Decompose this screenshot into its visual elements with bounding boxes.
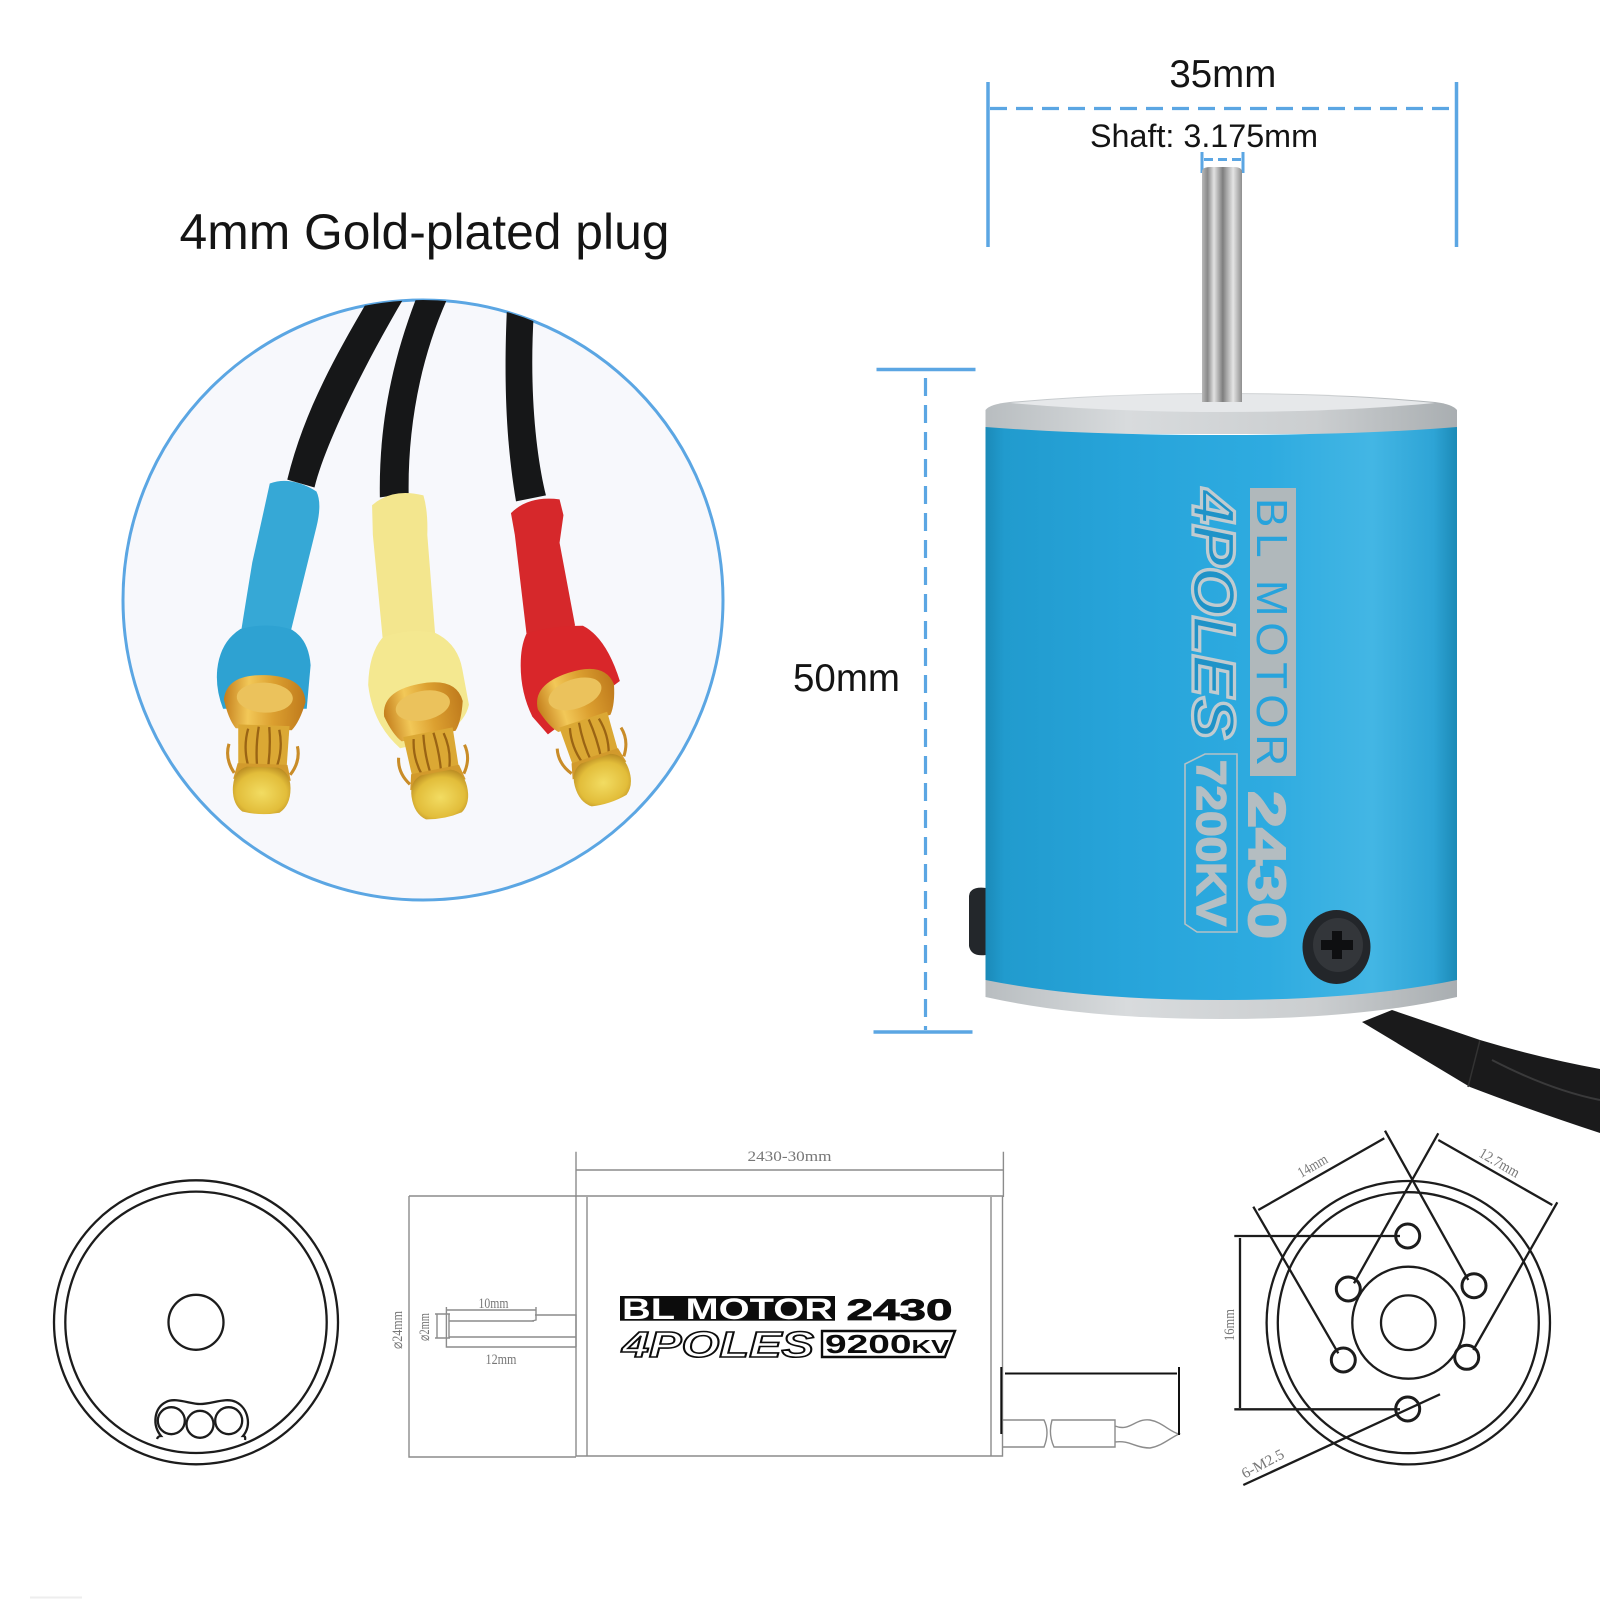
label: 50mm height: 50mm	[793, 657, 900, 700]
motor body outline	[576, 1152, 1003, 1456]
motor screw	[1302, 910, 1370, 984]
text: 14mm: 14mm	[1295, 1151, 1331, 1181]
motor label: 4POLES: 4POLES	[1180, 488, 1247, 739]
wires	[287, 300, 546, 501]
motor side stud	[969, 888, 986, 955]
connector: yellow	[368, 493, 470, 820]
motor bottom ring	[986, 975, 1457, 1019]
logo: 4POLES 9200KV: 4POLES	[621, 1324, 814, 1365]
logo: BL MOTOR 2430: BL MOTOR	[622, 1293, 833, 1326]
connector: blue	[217, 481, 319, 816]
dimension: 35mm bracket	[988, 82, 1456, 247]
motor top cap	[986, 393, 1457, 434]
motor photo	[969, 167, 1600, 1133]
logo: 4POLES 9200KV	[621, 1324, 955, 1365]
text: 12.7mm: 12.7mm	[1476, 1146, 1522, 1182]
drawing: side view of motor	[390, 1149, 1179, 1457]
label: 35mm width: 35mm	[1169, 53, 1276, 96]
dimension: shaft bracket	[1202, 152, 1243, 173]
text: 16mm: 16mm	[1222, 1309, 1238, 1341]
motor label: 7200KV: 7200KV	[1188, 760, 1235, 926]
mounting circles	[1267, 1181, 1550, 1464]
connector: red	[511, 498, 631, 806]
motor label: 2430: 2430	[1237, 791, 1295, 939]
motor label: BL MOTOR: BL MOTOR	[1247, 498, 1296, 766]
logo: BL MOTOR 2430	[620, 1293, 952, 1327]
dimension lines	[1234, 1131, 1557, 1485]
logo: 4POLES 9200KV: 9200 KV	[825, 1329, 949, 1359]
cable length dimension	[1001, 1367, 1179, 1435]
text: diameter 24mm: ⌀24mm	[390, 1311, 406, 1349]
title: 4mm Gold-plated plug: 4mm Gold-plated plug	[180, 204, 669, 260]
text: diameter 2mm: ⌀2mm	[417, 1313, 433, 1341]
shaft outline	[409, 1196, 576, 1457]
motor cable	[1362, 1010, 1600, 1133]
motor blue body	[986, 427, 1457, 1000]
text: 2430-30mm: 2430-30mm	[748, 1149, 832, 1165]
label: shaft diameter: Shaft: 3.175mm	[1090, 118, 1318, 154]
motor shaft	[1202, 167, 1242, 402]
text: 6-M2.5: 6-M2.5	[1239, 1447, 1287, 1482]
cable outline	[1002, 1420, 1179, 1448]
text: 12mm: 12mm	[486, 1352, 517, 1368]
panel: gold plated plug close-up	[123, 300, 723, 900]
logo: BL MOTOR 2430: 2430	[846, 1294, 952, 1327]
drawing: front view with mounting holes	[1222, 1131, 1557, 1485]
dimension: 50mm bracket	[874, 370, 976, 1032]
text: 10mm: 10mm	[478, 1296, 509, 1312]
drawing: rear view of motor	[54, 1180, 338, 1464]
